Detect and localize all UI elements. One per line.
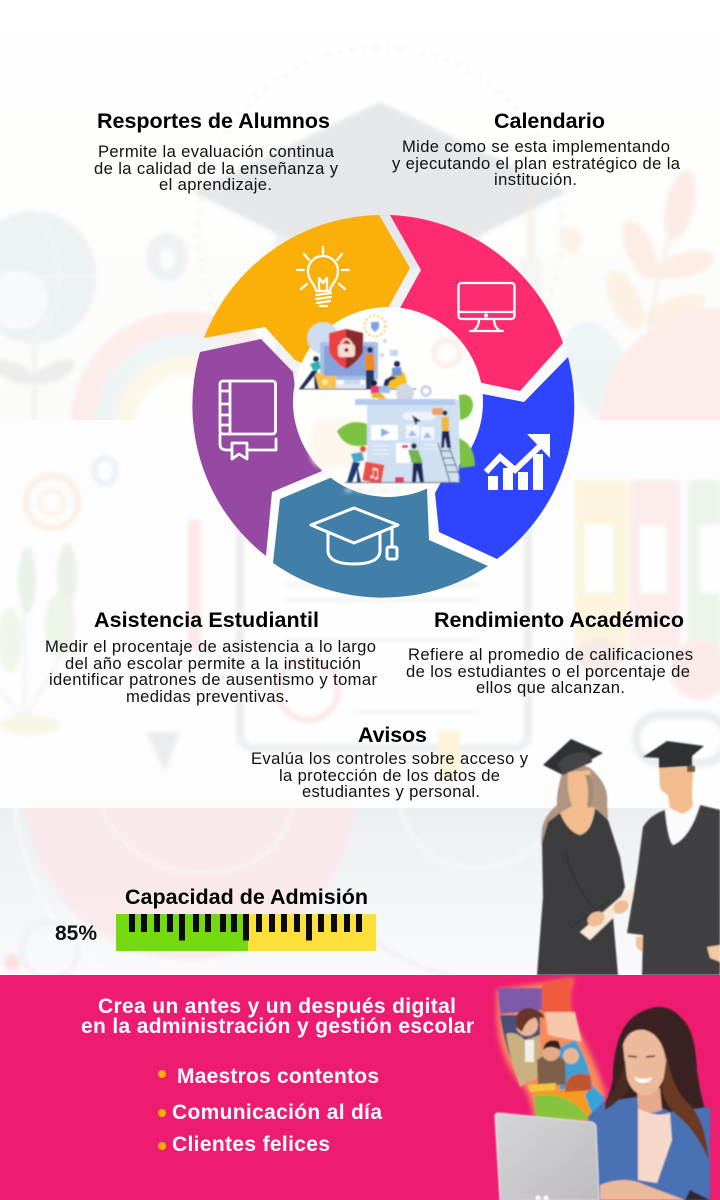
gauge value: 85% bbox=[55, 922, 97, 945]
text block: Rendimiento Académico: Rendimiento Académico bbox=[434, 608, 684, 632]
text block: Calendario: institución. bbox=[494, 170, 577, 189]
bullet list bbox=[158, 1065, 382, 1156]
text block: Resportes de Alumnos: Permite la evaluación continua bbox=[98, 142, 335, 161]
text block: Resportes de Alumnos: Resportes de Alumnos bbox=[97, 109, 330, 133]
band heading: en la administración y gestión escolar bbox=[81, 1015, 474, 1038]
ruler bar bbox=[116, 914, 376, 951]
text block: Rendimiento Académico: de los estudiantes o el porcentaje de bbox=[406, 662, 690, 681]
text block: Calendario: y ejecutando el plan estratégico de la bbox=[392, 154, 681, 173]
text block: Asistencia Estudiantil: identificar patrones de ausentismo y tomar bbox=[49, 670, 377, 689]
image: teacher with children collage bbox=[497, 978, 606, 1125]
icon: computer monitor bbox=[458, 283, 514, 331]
text block: Asistencia Estudiantil: Asistencia Estudiantil bbox=[94, 608, 319, 632]
web content scene: ♫ bbox=[368, 466, 381, 482]
text block: Avisos: Evalúa los controles sobre acceso y bbox=[251, 749, 529, 768]
text block: Asistencia Estudiantil bbox=[45, 608, 377, 706]
text block: Rendimiento Académico bbox=[406, 608, 693, 697]
text block: Asistencia Estudiantil: del año escolar permite a la institución bbox=[65, 654, 361, 673]
band heading bbox=[81, 995, 474, 1038]
image: woman with laptop bbox=[495, 1007, 710, 1200]
bullet list: Clientes felices bbox=[172, 1133, 330, 1156]
text block: Resportes de Alumnos: de la calidad de la enseñanza y bbox=[94, 159, 339, 178]
gauge heading: Capacidad de Admisión bbox=[125, 885, 368, 909]
text block: Calendario: Mide como se esta implementando bbox=[402, 137, 670, 156]
text block: Asistencia Estudiantil: medidas preventivas. bbox=[126, 687, 289, 706]
faded ring in center bbox=[310, 340, 460, 490]
segment: teal bbox=[273, 470, 488, 598]
web content scene bbox=[337, 384, 475, 484]
gauge: admission capacity bbox=[55, 885, 376, 951]
text block: Avisos: Avisos bbox=[358, 723, 427, 747]
text block: Calendario: Calendario bbox=[494, 109, 605, 133]
illustration: graduates bbox=[537, 739, 720, 975]
segment: blue bbox=[435, 357, 574, 559]
center illustration: security and web content team bbox=[299, 316, 475, 484]
text block: Avisos bbox=[251, 723, 529, 801]
pink call-to-action band bbox=[0, 975, 720, 1200]
security scene bbox=[299, 316, 416, 405]
icon: growth chart bbox=[486, 434, 550, 490]
bullet list: Comunicación al día bbox=[172, 1101, 382, 1124]
icon: graduation cap bbox=[311, 508, 398, 564]
laptop bbox=[495, 1113, 599, 1200]
segment: yellow bbox=[204, 215, 410, 402]
text block: Avisos: la protección de los datos de bbox=[279, 766, 500, 785]
text block: Rendimiento Académico: Refiere al promedio de calificaciones bbox=[408, 645, 693, 664]
text block: Rendimiento Académico: ellos que alcanzan. bbox=[476, 678, 625, 697]
icon: book bbox=[220, 381, 276, 459]
text block: Avisos: estudiantes y personal. bbox=[302, 782, 480, 801]
segment: pink bbox=[390, 215, 563, 391]
graduate: man bbox=[627, 741, 720, 975]
circular process wheel bbox=[192, 215, 574, 598]
text block: Asistencia Estudiantil: Medir el procentaje de asistencia a lo largo bbox=[45, 637, 376, 656]
text block: Resportes de Alumnos: el aprendizaje. bbox=[159, 175, 272, 194]
graduate: woman bbox=[537, 739, 637, 975]
faded background illustration bbox=[0, 102, 720, 975]
band heading: Crea un antes y un después digital bbox=[98, 995, 456, 1018]
text block: Resportes de Alumnos bbox=[94, 109, 339, 194]
text block: Calendario bbox=[392, 109, 681, 189]
center circle bbox=[293, 307, 483, 497]
bullet list: Maestros contentos bbox=[177, 1065, 379, 1088]
segment: purple bbox=[192, 339, 322, 556]
icon: light bulb bbox=[297, 247, 349, 306]
